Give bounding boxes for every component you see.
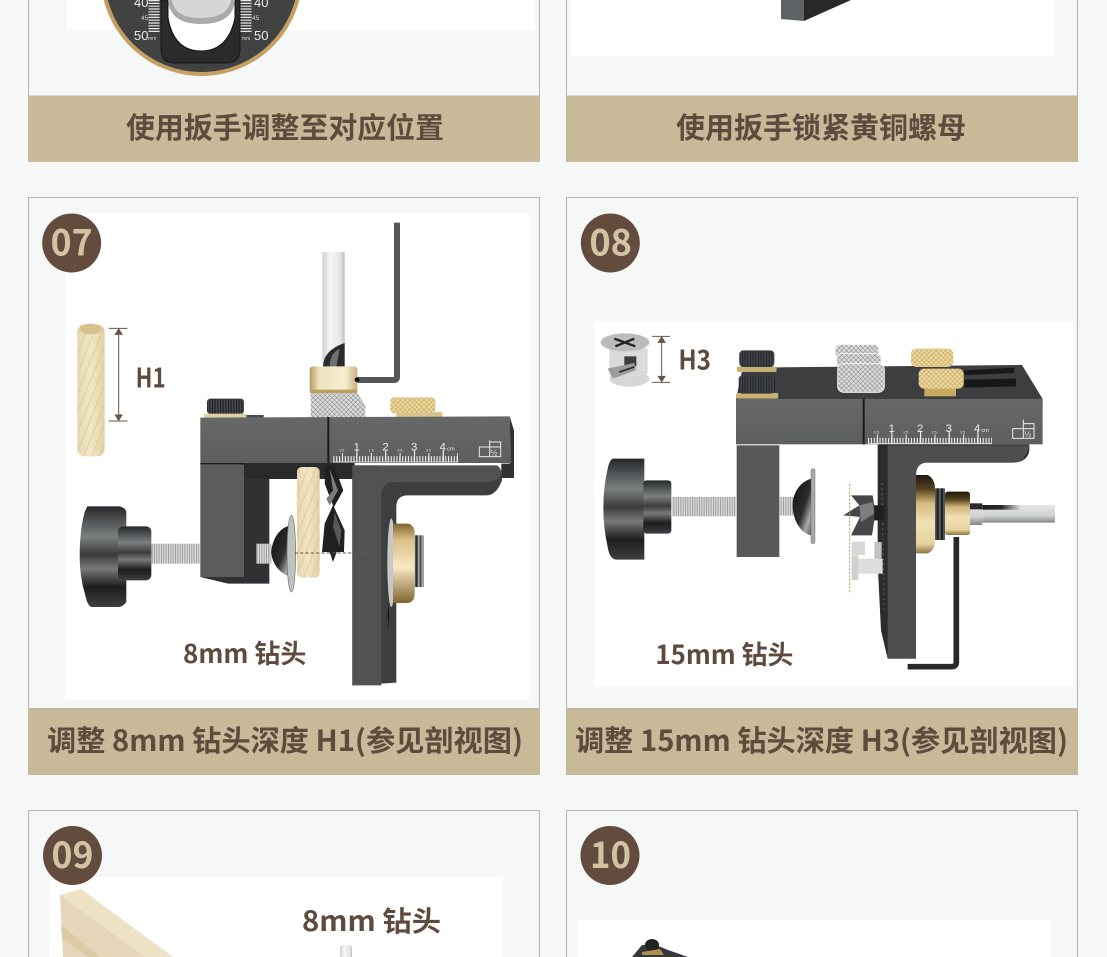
ruler: 0.5	[339, 449, 344, 453]
ruler: 2.5	[397, 449, 402, 453]
badge: 07	[42, 213, 101, 272]
T-knob	[80, 506, 151, 607]
badge: 09: 09	[52, 827, 94, 879]
icon: round depth gauge: 45	[252, 15, 260, 22]
label: H1: H1	[136, 357, 166, 396]
ruler: 2	[382, 441, 389, 453]
L bracket	[352, 465, 502, 685]
hex key	[908, 537, 956, 667]
ruler: 3.5	[426, 449, 431, 453]
icon: round depth gauge: mm	[242, 36, 250, 42]
panel: step 08 adjust 15mm bit depth	[566, 198, 1078, 708]
T-knob	[603, 459, 671, 560]
panel: step 07 adjust 8mm bit depth	[28, 198, 540, 708]
label: H3: H3	[678, 339, 711, 378]
icon: round depth gauge	[100, 0, 302, 76]
icon: wooden dowel	[77, 324, 105, 456]
cam fitting in section	[852, 542, 883, 580]
ruler: 2	[917, 423, 923, 435]
pressure foot	[271, 515, 296, 592]
ruler: 3	[411, 441, 417, 453]
badge: 10	[580, 826, 640, 885]
silver knobs	[835, 345, 884, 392]
ruler: 1	[354, 441, 360, 453]
panel: step 10	[566, 810, 1078, 957]
brass nut	[387, 518, 424, 607]
L bracket	[878, 444, 1029, 659]
icon: round depth gauge: mm	[148, 36, 156, 42]
label: 8mm bit: 8mm 钻头	[302, 900, 441, 940]
left leg	[737, 445, 779, 557]
Forstner bit	[843, 495, 884, 535]
label: 8mm bit: 8mm 钻头	[183, 634, 306, 671]
dowel sample	[297, 467, 320, 578]
caption: step 06: 使用扳手锁紧黄铜螺母	[676, 105, 966, 147]
main beam	[736, 399, 1043, 444]
half-depth symbol	[1013, 420, 1034, 439]
ruler: 1.5	[369, 449, 374, 453]
badge: 07: 07	[51, 214, 93, 266]
center dashed line	[848, 484, 851, 594]
screw thread	[672, 497, 793, 516]
brass nut and shank	[916, 475, 1055, 553]
under-beam shadow	[241, 463, 355, 479]
hex key	[356, 223, 397, 380]
dimension arrow H3	[652, 336, 670, 382]
ruler: 1	[889, 423, 895, 435]
ruler: 2.5	[932, 430, 937, 434]
caption: step 05	[28, 96, 540, 162]
center dashed line	[295, 551, 368, 554]
icon: drill shank	[340, 945, 352, 957]
drill bit	[322, 466, 345, 562]
ruler: 4	[974, 423, 980, 435]
ruler: cm	[981, 428, 989, 434]
ruler: cm	[447, 446, 455, 452]
ruler	[333, 441, 458, 462]
caption: step 07	[28, 709, 540, 775]
drill shank	[322, 252, 345, 364]
top plate	[736, 365, 1043, 399]
panel: step 09	[28, 810, 540, 957]
half-depth symbol: ½	[1024, 430, 1031, 439]
main beam	[200, 416, 511, 463]
badge: 08	[581, 213, 640, 272]
ruler: 0.5	[874, 430, 879, 434]
half-depth symbol: ½	[491, 449, 498, 458]
black knobs	[736, 350, 778, 399]
brass knob	[390, 397, 442, 417]
pressure foot	[793, 469, 815, 544]
brass knobs	[911, 349, 964, 396]
icon: round depth gauge: 50	[134, 28, 148, 43]
caption: step 08	[566, 709, 1078, 775]
badge: 10: 10	[590, 827, 631, 879]
screw thread	[150, 544, 271, 564]
ruler: 1.5	[903, 430, 908, 434]
ruler: 3	[946, 423, 952, 435]
caption: step 07: 调整 8mm 钻头深度 H1(参见剖视图)	[47, 718, 523, 760]
icon: tool corner fragment	[781, 0, 851, 21]
dimension arrow H1	[109, 328, 127, 421]
panel: step 06 lock brass nut	[566, 0, 1078, 96]
back end	[501, 416, 514, 478]
diagram: dowel jig with 15mm bit	[603, 345, 1055, 667]
diagram: dowel jig with 8mm bit	[80, 223, 514, 685]
silver knurled knob	[311, 392, 365, 417]
icon: round depth gauge: 45	[141, 15, 149, 22]
caption: step 06	[566, 96, 1078, 162]
badge: 08: 08	[589, 214, 632, 266]
label: 15mm bit: 15mm 钻头	[655, 635, 793, 672]
icon: jig fragment	[632, 939, 688, 957]
ruler	[868, 423, 992, 444]
black knob	[204, 399, 264, 418]
ruler: 3.5	[960, 430, 965, 434]
caption: step 08: 调整 15mm 钻头深度 H3(参见剖视图)	[575, 718, 1068, 760]
panel: step 05 adjust with wrench	[28, 0, 540, 96]
half-depth symbol	[479, 440, 501, 458]
ruler: 4	[440, 441, 446, 453]
caption: step 05: 使用扳手调整至对应位置	[126, 105, 444, 147]
brass collar	[310, 366, 359, 393]
icon: cam fitting	[601, 333, 649, 387]
left leg	[200, 465, 269, 584]
icon: round depth gauge: 50	[254, 28, 268, 43]
icon: wood board	[60, 889, 173, 957]
badge: 09	[43, 826, 102, 885]
